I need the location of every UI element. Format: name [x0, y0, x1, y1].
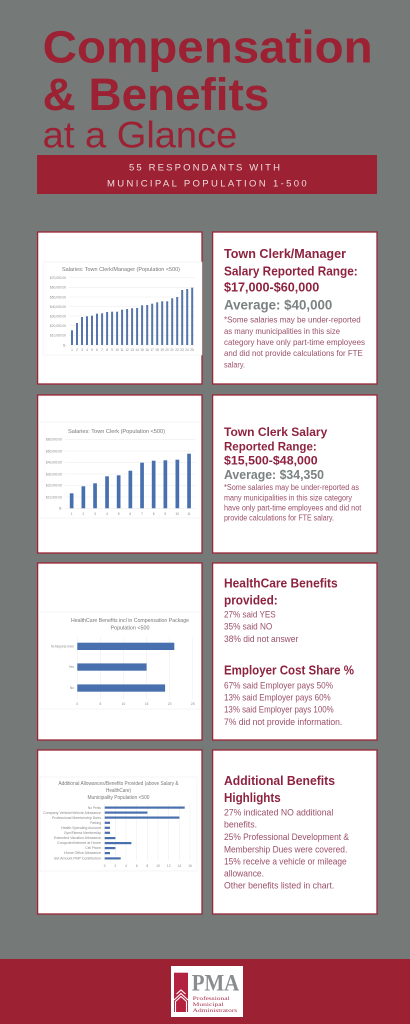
bar chart: healthcare benefits: 10: [122, 702, 125, 706]
bar chart: town clerk/manager salaries: 16: [145, 348, 149, 352]
bar chart: town clerk/manager salaries: Salaries: Town Clerk/Manager (Population <500): [62, 267, 180, 273]
cost share percentages: 13% said Employer pays 100%: [224, 704, 334, 715]
subtitle banner: MUNICIPAL POPULATION 1-500: [107, 179, 307, 190]
bar chart: town clerk/manager salaries: 11: [120, 348, 124, 352]
logo organisation name: Municipal: [193, 1002, 224, 1008]
footnote: many municipalities in this size category: [224, 493, 352, 502]
bar chart: town clerk salaries: 6: [129, 512, 131, 516]
bar chart: town clerk/manager salaries: 7: [101, 348, 103, 352]
bar chart: town clerk salaries: Salaries: Town Clerk (Population <500): [68, 429, 165, 435]
bar chart: additional allowances: HealthCare): [106, 788, 131, 794]
bar chart: town clerk/manager salaries: 9: [111, 348, 113, 352]
panel: additional allowances chart: [38, 750, 202, 914]
footnote: [224, 483, 362, 523]
healthcare percentages: [224, 608, 298, 644]
bar chart: additional allowances: 6: [136, 864, 138, 868]
bar chart: additional allowances: 2: [115, 864, 117, 868]
heading: salary range: Town Clerk/Manager: [224, 246, 346, 261]
benefits highlights: Other benefits listed in chart.: [224, 880, 334, 891]
bar chart: additional allowances: 16: [188, 864, 192, 868]
panel: healthcare chart: [38, 563, 202, 740]
logo: PMA: [171, 966, 243, 1017]
subtitle banner: [37, 155, 377, 194]
bar chart: town clerk/manager salaries: 14: [135, 348, 139, 352]
average salary: Average: $34,350: [224, 467, 324, 482]
panel: town clerk/manager salary text: [213, 232, 377, 384]
bar chart: healthcare benefits: No Response Given: [51, 644, 74, 648]
bar chart: additional allowances: Company Vehicle/Vehicle Allowance: [43, 811, 101, 815]
bar chart: healthcare benefits: Yes: [69, 665, 74, 669]
bar chart: town clerk salaries: 11: [187, 512, 191, 516]
icon: house on red block: [174, 973, 188, 1012]
bar chart: town clerk salaries: 8: [153, 512, 155, 516]
logo wordmark: PMA: [192, 971, 240, 996]
bar chart: town clerk/manager salaries: 6: [96, 348, 98, 352]
bar chart: town clerk/manager salaries: $70,000.00: [50, 276, 66, 280]
bar chart: town clerk/manager salaries: 13: [130, 348, 134, 352]
heading: salary range: Salary Reported Range:: [224, 264, 358, 279]
bar chart: town clerk salaries: $60,000.00: [46, 438, 62, 442]
benefits highlights: 25% Professional Development &: [224, 831, 350, 842]
bar chart: town clerk/manager salaries: $60,000.00: [50, 286, 66, 290]
footnote: category have only part-time employees: [224, 337, 365, 347]
title: Compensation: [43, 22, 373, 73]
heading: salary range: [224, 425, 328, 468]
bar chart: town clerk/manager salaries: $30,000.00: [50, 314, 66, 318]
panel: healthcare text: [213, 563, 377, 740]
subtitle banner: 55 RESPONDANTS WITH: [129, 162, 280, 173]
bar chart: town clerk/manager salaries: $10,000.00: [50, 334, 66, 338]
cost share percentages: 13% said Employer pays 60%: [224, 691, 331, 702]
bar chart: town clerk/manager salaries: 17: [150, 348, 154, 352]
heading: salary range: $17,000-$60,000: [224, 280, 319, 295]
heading: salary range: [224, 246, 358, 295]
bar chart: additional allowances: Computer/Internet at Home: [57, 841, 101, 845]
bar chart: town clerk/manager salaries: $20,000.00: [50, 324, 66, 328]
bar chart: additional allowances: [40, 777, 197, 871]
bar chart: healthcare benefits: 20: [168, 702, 172, 706]
bar chart: healthcare benefits: HealthCare Benefits incl in Compensation Package: [71, 618, 189, 624]
bar chart: additional allowances: 14: [178, 864, 181, 868]
bar chart: town clerk/manager salaries: [43, 262, 202, 355]
heading: employer cost share: Employer Cost Share %: [224, 663, 354, 678]
bar chart: town clerk salaries: 9: [164, 512, 166, 516]
benefits highlights: benefits.: [224, 819, 257, 830]
bar chart: additional allowances: Parking: [90, 821, 101, 825]
benefits highlights: allowance.: [224, 868, 264, 879]
bar chart: healthcare benefits: 0: [76, 702, 78, 706]
title: at a Glance: [43, 115, 237, 156]
bar chart: town clerk/manager salaries: 10: [115, 348, 119, 352]
bar chart: town clerk/manager salaries: 15: [140, 348, 144, 352]
bar chart: town clerk salaries: 4: [106, 512, 108, 516]
footer band: [0, 959, 410, 1024]
bar chart: town clerk/manager salaries: 19: [160, 348, 164, 352]
benefits highlights: Membership Dues were covered.: [224, 843, 347, 854]
bar chart: town clerk salaries: $10,000.00: [46, 495, 62, 499]
footnote: have only part-time employees and did not: [224, 503, 362, 512]
bar chart: additional allowances: 0: [104, 864, 106, 868]
bar chart: additional allowances: Set Amount RNP Contribution: [54, 856, 101, 860]
panel: town clerk/manager salary chart: [38, 232, 202, 384]
bar chart: additional allowances: 4: [125, 864, 127, 868]
benefits highlights: [224, 807, 350, 891]
bar chart: additional allowances: No Perks: [88, 806, 101, 810]
heading: salary range: Reported Range:: [224, 440, 317, 454]
bar chart: town clerk/manager salaries: 1: [71, 348, 73, 352]
logo organisation name: Administrators: [193, 1008, 237, 1014]
bar chart: additional allowances: Municipality Population <500: [88, 795, 150, 801]
bar chart: healthcare benefits: Population <500: [110, 626, 150, 632]
footnote: [224, 314, 365, 370]
footnote: salary.: [224, 360, 245, 370]
average salary: Average: $40,000: [224, 297, 332, 313]
bar chart: additional allowances: Professional Membership Dues: [52, 816, 101, 820]
logo organisation name: [193, 995, 237, 1014]
bar chart: town clerk/manager salaries: 23: [180, 348, 184, 352]
bar chart: town clerk salaries: $40,000.00: [46, 461, 62, 465]
cost share percentages: 7% did not provide information.: [224, 716, 342, 727]
bar chart: town clerk salaries: $-: [59, 507, 62, 511]
healthcare percentages: 27% said YES: [224, 608, 276, 619]
bar chart: town clerk salaries: [38, 422, 201, 518]
heading: additional benefits: Additional Benefits: [224, 773, 335, 788]
bar chart: town clerk salaries: 2: [82, 512, 84, 516]
bar chart: town clerk/manager salaries: $50,000.00: [50, 295, 66, 299]
panel: additional benefits text: [213, 750, 377, 914]
heading: additional benefits: [224, 773, 335, 805]
bar chart: town clerk salaries: $20,000.00: [46, 484, 62, 488]
bar chart: town clerk salaries: $30,000.00: [46, 472, 62, 476]
bar chart: additional allowances: Additional Allowances/Benefits Provided (above Salary &: [58, 781, 179, 787]
bar chart: town clerk/manager salaries: $-: [63, 343, 66, 347]
heading: salary range: Town Clerk Salary: [224, 425, 328, 439]
bar chart: town clerk/manager salaries: 4: [86, 348, 88, 352]
bar chart: town clerk/manager salaries: 8: [106, 348, 108, 352]
footnote: and did not provide calculations for FTE: [224, 348, 363, 358]
bar chart: additional allowances: Home Office Allowance: [64, 851, 101, 855]
bar chart: healthcare benefits: 25: [191, 702, 195, 706]
bar chart: additional allowances: Health Spending Account: [61, 826, 101, 830]
bar chart: town clerk salaries: $50,000.00: [46, 449, 62, 453]
bar chart: additional allowances: 12: [167, 864, 171, 868]
bar chart: additional allowances: Extended Vacation Allowance: [54, 836, 101, 840]
heading: healthcare benefits: [224, 575, 338, 608]
bar chart: additional allowances: 10: [156, 864, 160, 868]
bar chart: healthcare benefits: No: [70, 686, 74, 690]
bar chart: town clerk/manager salaries: 22: [175, 348, 179, 352]
bar chart: healthcare benefits: 5: [100, 702, 102, 706]
bar chart: town clerk/manager salaries: 18: [155, 348, 159, 352]
bar chart: town clerk/manager salaries: $40,000.00: [50, 305, 66, 309]
bar chart: additional allowances: Gym/Fitness Membership: [64, 831, 101, 835]
bar chart: town clerk/manager salaries: 12: [125, 348, 129, 352]
heading: healthcare benefits: provided:: [224, 593, 278, 608]
bar chart: additional allowances: Cell Phone: [85, 846, 101, 850]
footnote: *Some salaries may be under-reported: [224, 314, 361, 324]
bar chart: town clerk/manager salaries: 20: [165, 348, 169, 352]
bar chart: town clerk salaries: 7: [141, 512, 143, 516]
heading: healthcare benefits: HealthCare Benefits: [224, 575, 338, 590]
bar chart: town clerk salaries: 1: [71, 512, 73, 516]
bar chart: town clerk salaries: 5: [118, 512, 120, 516]
heading: salary range: $15,500-$48,000: [224, 454, 318, 468]
bar chart: town clerk/manager salaries: 3: [81, 348, 83, 352]
bar chart: town clerk/manager salaries: 2: [76, 348, 78, 352]
cost share percentages: 67% said Employer pays 50%: [224, 679, 333, 690]
bar chart: healthcare benefits: 15: [145, 702, 149, 706]
bar chart: town clerk/manager salaries: 5: [91, 348, 93, 352]
bar chart: healthcare benefits: [38, 612, 201, 709]
footnote: *Some salaries may be under-reported as: [224, 483, 359, 492]
logo organisation name: Professional: [193, 995, 230, 1002]
heading: additional benefits: Highlights: [224, 790, 281, 805]
benefits highlights: 15% receive a vehicle or mileage: [224, 855, 347, 866]
bar chart: town clerk salaries: 10: [176, 512, 179, 516]
panel: town clerk salary chart: [38, 395, 202, 553]
footnote: provide calculations for FTE salary.: [224, 514, 334, 523]
title: & Benefits: [43, 69, 269, 120]
benefits highlights: 27% indicated NO additional: [224, 807, 333, 818]
title: [43, 22, 373, 156]
bar chart: additional allowances: 8: [147, 864, 149, 868]
bar chart: town clerk/manager salaries: 21: [170, 348, 174, 352]
bar chart: town clerk/manager salaries: 24: [185, 348, 189, 352]
cost share percentages: [224, 679, 342, 727]
bar chart: town clerk/manager salaries: 25: [190, 348, 194, 352]
panel: town clerk salary text: [213, 395, 377, 553]
bar chart: town clerk salaries: 3: [94, 512, 96, 516]
healthcare percentages: 38% did not answer: [224, 633, 298, 644]
healthcare percentages: 35% said NO: [224, 621, 272, 632]
footnote: as many municipalities in this size: [224, 326, 340, 336]
